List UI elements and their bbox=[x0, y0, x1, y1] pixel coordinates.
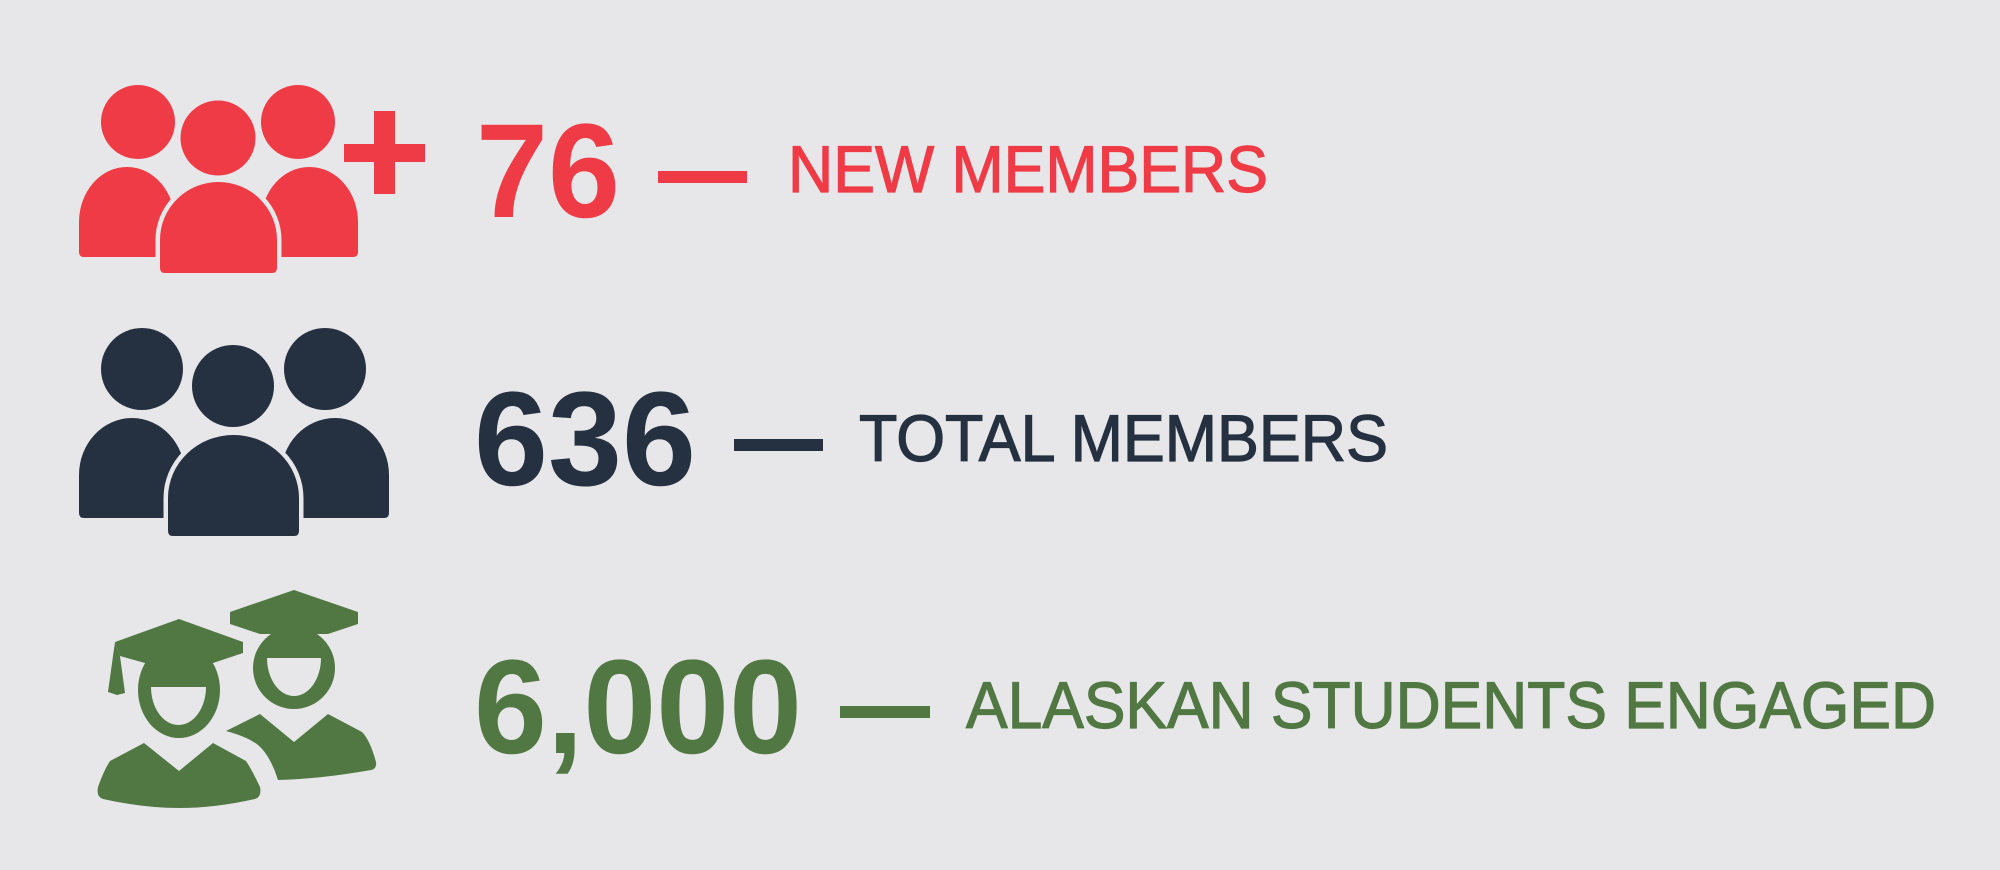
row: total members bbox=[79, 328, 1388, 536]
icon: navy group bbox=[79, 328, 389, 536]
number: 76: 76 bbox=[476, 97, 620, 246]
dash bbox=[658, 171, 747, 183]
icon: graduates bbox=[98, 590, 376, 808]
dash bbox=[734, 439, 823, 451]
row: new members bbox=[79, 85, 1268, 273]
number: 6,000: 6,000 bbox=[474, 633, 802, 782]
back graduate bbox=[253, 627, 335, 709]
label: total members: TOTAL MEMBERS bbox=[859, 401, 1388, 475]
number: 636: 636 bbox=[474, 365, 696, 514]
row: alaskan students engaged bbox=[98, 590, 1936, 808]
dash bbox=[840, 706, 930, 718]
label: alaskan students engaged: ALASKAN STUDENTS ENGAGED bbox=[966, 668, 1936, 742]
label: new members: NEW MEMBERS bbox=[788, 132, 1268, 206]
front graduate bbox=[138, 642, 220, 738]
icon: red group with plus bbox=[79, 85, 425, 273]
